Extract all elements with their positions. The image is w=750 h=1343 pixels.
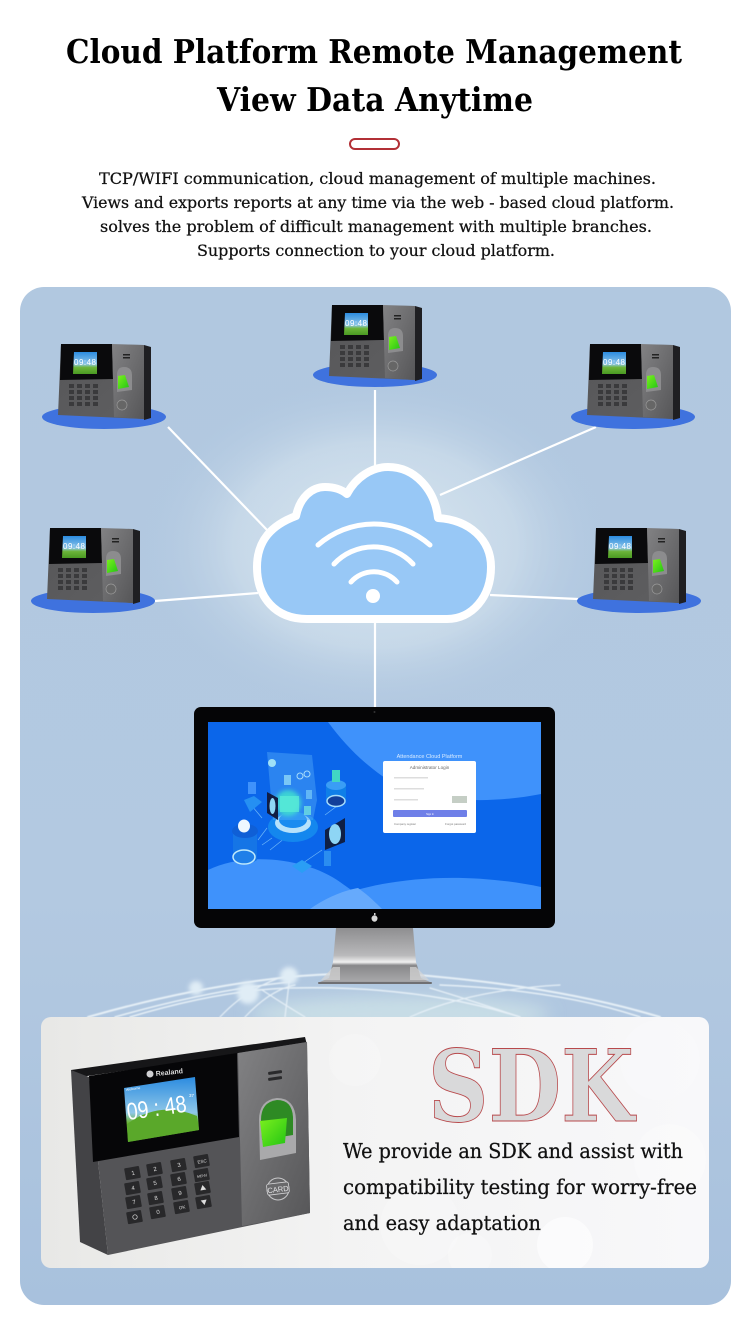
login card: Sign In: [426, 813, 434, 816]
fingerprint sensor: [259, 1098, 296, 1160]
SDK description: [343, 1139, 697, 1235]
card reader mark: [266, 1178, 290, 1200]
illustration: isometric data centre: [232, 752, 346, 873]
description text: TCP/WIFI communication, cloud management of multiple machines.: [99, 170, 656, 188]
device LCD clock: Welcome: [126, 1086, 141, 1092]
title: Cloud Platform Remote Management: [66, 32, 683, 71]
login card: [383, 761, 476, 833]
red pill divider: [350, 139, 399, 149]
device LCD clock: [124, 1077, 199, 1142]
globe network arcs: [88, 967, 660, 1032]
icon: apple logo: [372, 913, 378, 922]
description text: Views and exports reports at any time via the web - based cloud platform.: [81, 194, 674, 212]
device: top centre: 09:48: [345, 319, 368, 328]
keypad: ESC: [197, 1158, 208, 1165]
keypad: 3: [177, 1163, 182, 1169]
device: top left: 09:48: [74, 358, 97, 367]
description text: [81, 170, 674, 260]
keypad: [124, 1154, 212, 1224]
device: top left: [42, 344, 166, 429]
login heading: Attendance Cloud Platform: [397, 754, 463, 760]
large attendance device: Realand: [155, 1068, 183, 1078]
monitor stand: [318, 928, 432, 984]
SDK description: and easy adaptation: [343, 1211, 541, 1235]
keypad: 1: [131, 1171, 136, 1177]
SDK description: We provide an SDK and assist with: [343, 1139, 683, 1163]
keypad: 6: [177, 1177, 182, 1183]
description text: Supports connection to your cloud platform.: [197, 242, 555, 260]
device: middle left: 09:48: [63, 542, 86, 551]
screen: login page: [208, 722, 541, 909]
keypad: 5: [153, 1181, 158, 1187]
device: top right: [571, 344, 695, 429]
device LCD clock: 09 : 48: [125, 1091, 188, 1126]
device LCD clock: 37: [189, 1093, 195, 1098]
login card: Forgot password: [445, 822, 466, 826]
panel: cloud platform network: [20, 287, 731, 1305]
device: top centre: [313, 305, 437, 387]
card reader mark: CARD: [267, 1184, 290, 1195]
keypad: OK: [178, 1204, 186, 1211]
device: top right: 09:48: [603, 358, 626, 367]
keypad: 2: [153, 1167, 158, 1173]
keypad: 0: [156, 1210, 161, 1216]
large attendance device: [71, 1037, 310, 1255]
title: View Data Anytime: [216, 80, 533, 119]
keypad: 8: [154, 1196, 159, 1202]
device: middle right: [577, 528, 701, 613]
login card: Company register: [394, 822, 416, 826]
SDK description: compatibility testing for worry-free: [343, 1175, 697, 1199]
bokeh highlights: [329, 1020, 706, 1277]
keypad: 4: [131, 1186, 136, 1192]
title: [66, 32, 683, 119]
device: middle left: [31, 528, 155, 613]
SDK heading: SDK: [428, 1029, 637, 1145]
keypad: 9: [178, 1191, 183, 1197]
login card: Administrator Login: [410, 765, 450, 770]
icon: wifi cloud: [257, 467, 491, 619]
keypad: MENU: [197, 1173, 208, 1179]
connection lines: [155, 390, 596, 708]
description text: solves the problem of difficult management with multiple branches.: [100, 218, 652, 236]
cloud glow: [140, 375, 610, 715]
device: middle right: 09:48: [609, 542, 632, 551]
speaker slots: [268, 1070, 282, 1081]
keypad: 7: [132, 1200, 137, 1206]
panel: SDK card: [41, 1017, 709, 1277]
monitor: [194, 707, 555, 928]
